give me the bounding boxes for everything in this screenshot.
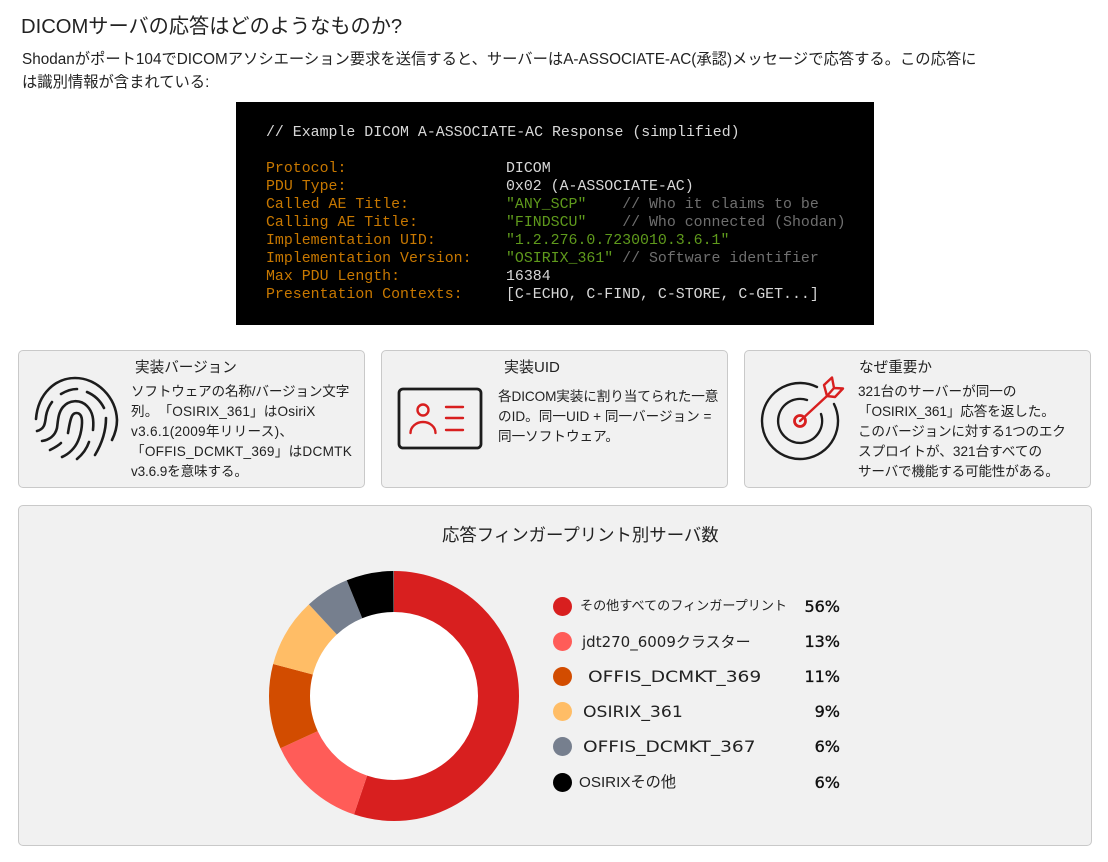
icon: target with arrow	[760, 376, 844, 460]
code panel: A-ASSOCIATE-AC response: [C-ECHO, C-FIND, C-STORE, C-GET...]	[506, 287, 819, 303]
heading: なぜ重要か	[859, 360, 932, 376]
code panel: A-ASSOCIATE-AC response: 16384	[506, 269, 551, 285]
body text: 列。「OSIRIX_361」はOsiriX	[131, 404, 315, 419]
code panel: A-ASSOCIATE-AC response: Implementation UID:	[266, 233, 436, 249]
code panel: A-ASSOCIATE-AC response: Max PDU Length:	[266, 269, 400, 285]
body text: サーバで機能する可能性がある。	[858, 464, 1059, 479]
legend row: OSIRIX other	[553, 773, 840, 792]
body text: このバージョンに対する1つのエク	[858, 424, 1066, 439]
legend row: all other fingerprints: その他すべてのフィンガープリント	[580, 598, 787, 613]
code panel: A-ASSOCIATE-AC response: Presentation Contexts:	[266, 287, 463, 303]
legend row: OFFIS_DCMKT_367: OFFIS_DCMKT_367	[583, 737, 756, 756]
body text: v3.6.9を意味する。	[131, 464, 248, 479]
code panel: A-ASSOCIATE-AC response: "FINDSCU" // Who connected (Shodan)	[506, 215, 846, 231]
legend row: OSIRIX other: OSIRIXその他	[579, 774, 676, 791]
body text: 「OSIRIX_361」応答を返した。	[858, 404, 1055, 419]
code panel: A-ASSOCIATE-AC response	[236, 102, 874, 325]
panel: donut chart	[18, 505, 1092, 846]
body text	[131, 384, 352, 479]
intro text	[22, 50, 976, 91]
code panel: A-ASSOCIATE-AC response: Implementation Version:	[266, 251, 472, 267]
heading: 実装UID	[504, 359, 560, 376]
intro text: は識別情報が含まれている:	[22, 74, 209, 91]
legend row: OFFIS_DCMKT_369: 11%	[804, 667, 840, 686]
body text: 同一ソフトウェア。	[498, 429, 619, 444]
legend row: OSIRIX_361: 9%	[815, 702, 840, 721]
body text: 各DICOM実装に割り当てられた一意	[498, 389, 718, 404]
legend row: OFFIS_DCMKT_369: OFFIS_DCMKT_369	[588, 667, 761, 686]
intro text: Shodanがポート104でDICOMアソシエーション要求を送信すると、サーバーはA-ASSOCIATE-AC(承認)メッセージで応答する。この応答に	[22, 51, 976, 68]
legend row: OSIRIX_361	[553, 702, 840, 721]
body text	[858, 384, 1066, 479]
body text: ソフトウェアの名称/バージョン文字	[131, 384, 349, 399]
legend row: OFFIS_DCMKT_369	[553, 667, 840, 686]
code panel: A-ASSOCIATE-AC response: DICOM	[506, 161, 551, 177]
icon: fingerprint	[34, 376, 118, 460]
code panel: A-ASSOCIATE-AC response: // Example DICOM A-ASSOCIATE-AC Response (simplified)	[266, 125, 740, 141]
legend row: OFFIS_DCMKT_367: 6%	[815, 737, 840, 756]
heading: 実装バージョン	[135, 360, 237, 376]
code panel: A-ASSOCIATE-AC response: Protocol:	[266, 161, 346, 177]
legend row: all other fingerprints: 56%	[804, 597, 840, 616]
code panel: A-ASSOCIATE-AC response: Called AE Title:	[266, 197, 409, 213]
donut chart	[269, 571, 519, 821]
body text: のID。同一UID + 同一バージョン =	[498, 409, 711, 424]
legend row: jdt270_6009 cluster: jdt270_6009クラスター	[582, 633, 751, 651]
code panel: A-ASSOCIATE-AC response: "1.2.276.0.7230010.3.6.1"	[506, 233, 729, 249]
chart title: 応答フィンガープリント別サーバ数	[442, 525, 719, 545]
body text: 「OFFIS_DCMKT_369」はDCMTK	[131, 444, 352, 459]
title: DICOMサーバの応答はどのようなものか?	[21, 16, 402, 38]
legend row: OSIRIX_361: OSIRIX_361	[583, 702, 683, 721]
panel: implementation UID	[381, 350, 728, 488]
code panel: A-ASSOCIATE-AC response: PDU Type:	[266, 179, 346, 195]
legend	[553, 597, 840, 792]
panel: why it matters	[744, 350, 1091, 488]
code panel: A-ASSOCIATE-AC response: 0x02 (A-ASSOCIATE-AC)	[506, 179, 694, 195]
legend row: OFFIS_DCMKT_367	[553, 737, 840, 756]
legend row: jdt270_6009 cluster	[553, 632, 840, 651]
icon: ID card	[398, 388, 482, 450]
code panel: A-ASSOCIATE-AC response: "ANY_SCP" // Who it claims to be	[506, 197, 819, 213]
body text: スプロイトが、321台すべての	[858, 444, 1042, 459]
code panel: A-ASSOCIATE-AC response: Calling AE Title:	[266, 215, 418, 231]
panel: implementation version	[18, 350, 365, 488]
legend row: all other fingerprints	[553, 597, 840, 616]
body text: 321台のサーバーが同一の	[858, 384, 1016, 399]
code panel: A-ASSOCIATE-AC response: "OSIRIX_361" // Software identifier	[506, 251, 819, 267]
body text: v3.6.1(2009年リリース)、	[131, 424, 293, 439]
legend row: OSIRIX other: 6%	[815, 773, 840, 792]
body text	[498, 389, 718, 444]
legend row: jdt270_6009 cluster: 13%	[804, 632, 840, 651]
